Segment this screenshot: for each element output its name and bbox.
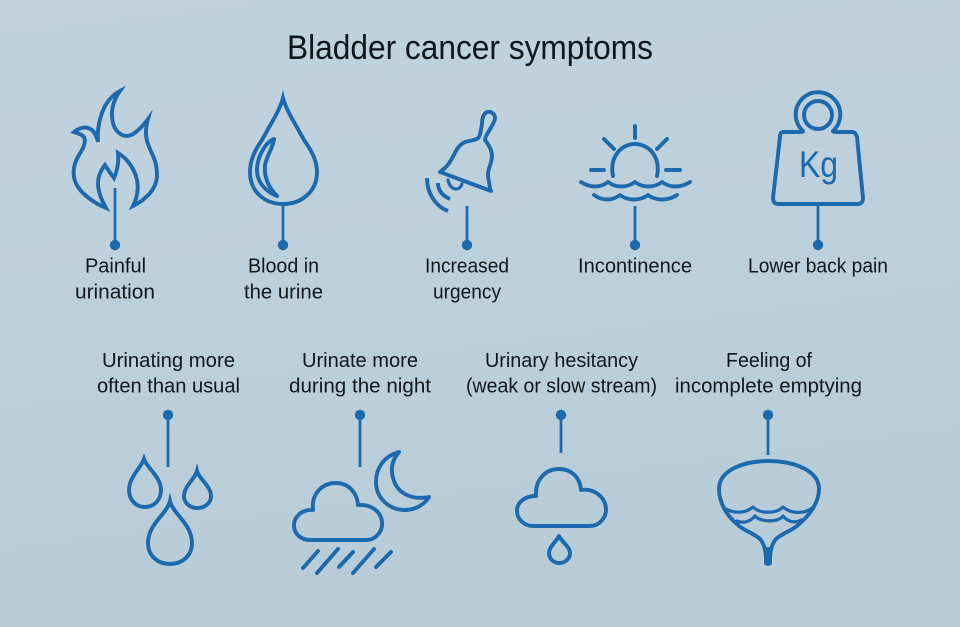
label: incomplete emptying: incomplete emptying <box>675 376 862 398</box>
label: painful urination: urination <box>75 282 155 304</box>
label: lower back pain: Lower back pain <box>748 256 888 278</box>
icon: bell <box>427 112 495 250</box>
icon: bladder <box>719 410 819 563</box>
label: increased urgency: urgency <box>433 282 501 304</box>
label: incontinence: Incontinence <box>578 256 692 278</box>
icon: cloud with single drop <box>517 410 606 563</box>
icon: cloud, moon and rain <box>294 410 429 573</box>
label: urinary hesitancy <box>466 350 657 398</box>
title: Bladder cancer symptoms <box>287 29 653 67</box>
icon: three drops <box>129 410 211 564</box>
label: painful urination: Painful <box>85 256 146 278</box>
label: urinate more at night: during the night <box>289 376 431 398</box>
label: increased urgency <box>425 256 509 304</box>
label: blood in the urine: Blood in <box>248 256 319 278</box>
label: painful urination <box>75 256 155 304</box>
icon: kilogram weight: Kg <box>799 144 838 185</box>
icon: blood drop <box>250 98 317 250</box>
label: increased urgency: Increased <box>425 256 509 278</box>
label: urinating more often: Urinating more <box>102 350 235 372</box>
label: blood in the urine <box>244 256 323 304</box>
icon: flame <box>74 91 157 250</box>
label: urinating more often <box>97 350 240 398</box>
label: urinate more at night: Urinate more <box>302 350 418 372</box>
label: incomplete emptying: Feeling of <box>726 350 812 372</box>
label: urinating more often: often than usual <box>97 376 240 398</box>
label: urinary hesitancy: (weak or slow stream) <box>466 376 657 398</box>
label: incomplete emptying <box>675 350 862 398</box>
label: blood in the urine: the urine <box>244 282 323 304</box>
icon: kilogram weight <box>773 92 863 250</box>
label: urinate more at night <box>289 350 431 398</box>
label: urinary hesitancy: Urinary hesitancy <box>485 350 638 372</box>
icon: sun over water <box>581 126 690 250</box>
